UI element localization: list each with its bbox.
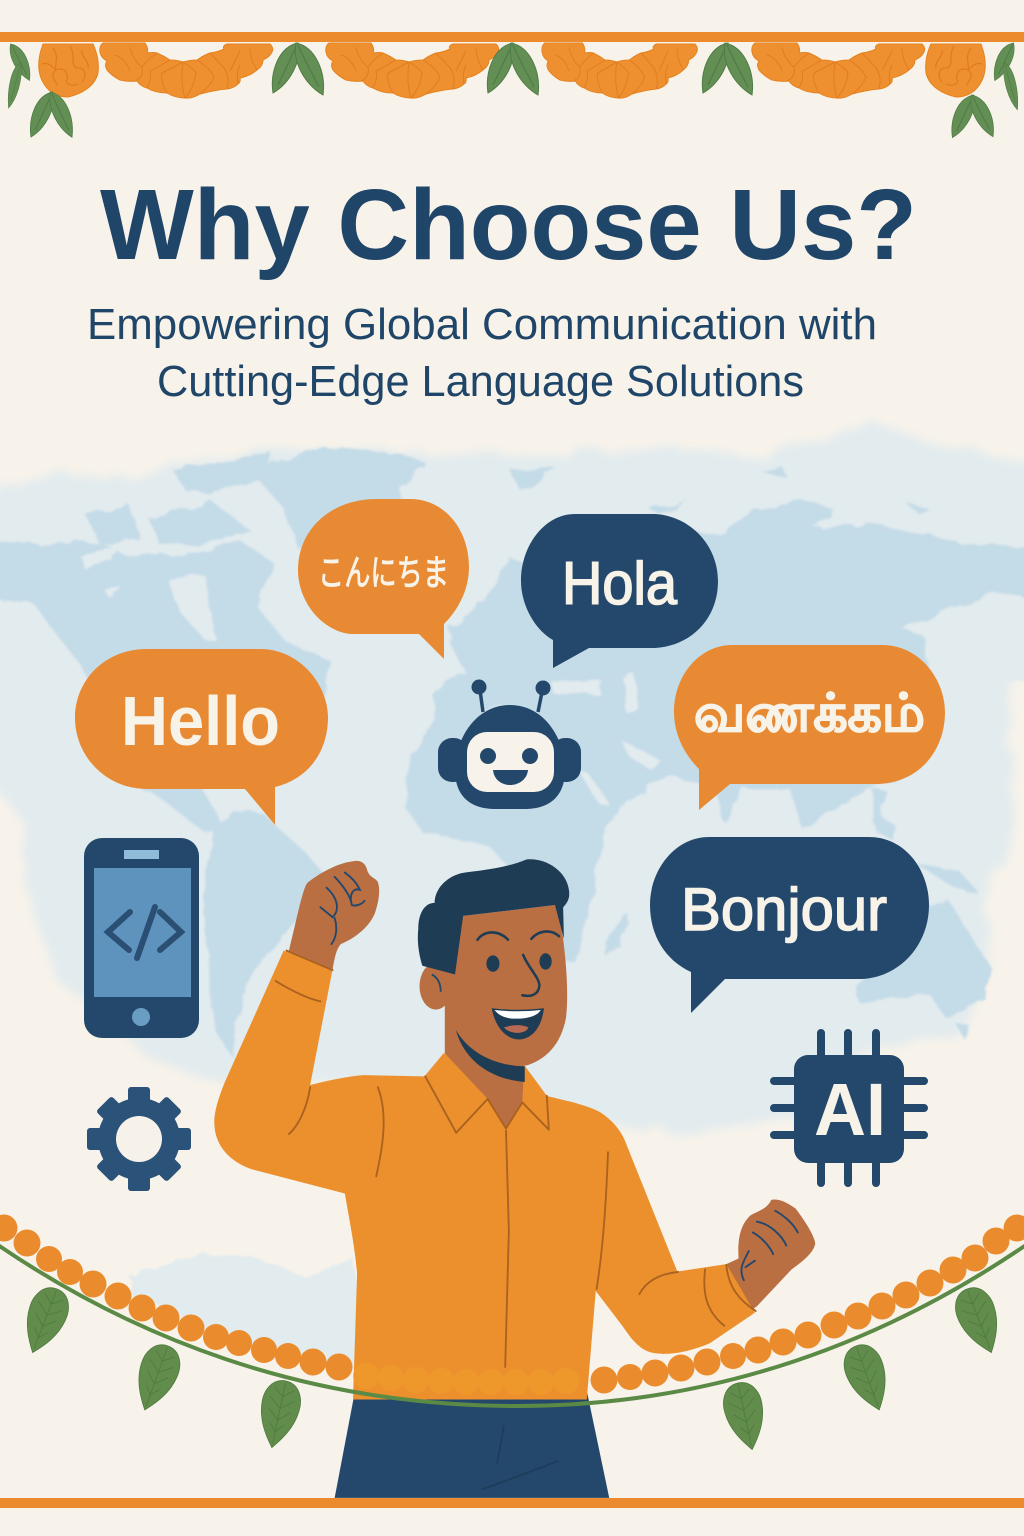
icon: robot — [438, 680, 581, 809]
icon: AI chip: AI — [814, 1068, 886, 1151]
madagascar — [605, 914, 629, 956]
lower fist — [726, 1200, 815, 1312]
trousers — [335, 1391, 609, 1498]
top border band — [0, 32, 1024, 42]
shirt creases — [275, 951, 756, 1367]
new guinea — [915, 863, 979, 893]
south america — [205, 813, 325, 1057]
japan — [965, 595, 1000, 650]
arctic islands — [173, 453, 273, 495]
subtitle: Cutting-Edge Language Solutions — [157, 357, 804, 406]
title: Why Choose Us? — [100, 169, 917, 281]
central america — [143, 785, 225, 832]
hair — [418, 859, 569, 974]
speech bubble: Hola — [521, 514, 718, 668]
marigold swag 1 — [100, 43, 273, 98]
speech bubble: Tamil: வணக்கம் — [694, 684, 925, 743]
garland string and leaves — [0, 1245, 1024, 1453]
speech bubble: Hello: Hello — [121, 682, 280, 760]
brows and nose — [477, 931, 559, 996]
subtitle: Empowering Global Communication with — [87, 300, 877, 349]
bottom border band — [0, 1498, 1024, 1508]
world map background — [0, 418, 1024, 1375]
north america — [0, 540, 330, 790]
icon: gear — [87, 1087, 191, 1191]
garland beads — [0, 1214, 1024, 1394]
face — [446, 905, 567, 1066]
left marigold rosette — [39, 44, 98, 97]
icon: AI chip — [774, 1033, 924, 1183]
ear — [420, 963, 452, 1010]
speech bubble: Hola: Hola — [562, 550, 678, 617]
collar — [425, 1053, 488, 1133]
greenland — [250, 447, 425, 550]
leaf cluster 2 — [487, 43, 539, 95]
man celebrating — [214, 859, 815, 1498]
leaf cluster 1 — [272, 43, 324, 95]
beard line — [456, 1030, 525, 1082]
speech bubble: Japanese: こんにちま — [318, 552, 449, 593]
speech bubble: Tamil — [674, 645, 945, 810]
top marigold garland — [8, 43, 1018, 138]
right corner leaves — [952, 43, 1018, 138]
marigold swag 2 — [326, 43, 499, 98]
subtitle — [87, 300, 877, 406]
uk — [447, 622, 473, 648]
eurasia and africa — [405, 499, 1024, 960]
tasmania — [958, 1025, 972, 1040]
icon: phone with code — [84, 838, 199, 1038]
australia — [857, 901, 992, 1017]
raised fist — [289, 861, 379, 969]
faint beads over the shirt — [353, 1363, 579, 1395]
mouth — [492, 1008, 544, 1040]
marigold swag 3 — [542, 43, 697, 98]
neck — [445, 992, 525, 1128]
speech bubble: Bonjour: Bonjour — [681, 876, 887, 943]
eyes — [486, 955, 499, 972]
right marigold rosette — [926, 44, 985, 97]
leaf cluster 3 — [702, 43, 753, 95]
small arctic islands — [512, 468, 555, 490]
speech bubble: Hello — [75, 649, 328, 825]
speech bubble: Japanese — [298, 499, 469, 659]
shirt — [214, 951, 755, 1399]
left corner leaves — [8, 44, 72, 137]
marigold swag 4 — [752, 43, 925, 98]
indonesia — [872, 788, 895, 838]
speech bubble: Bonjour — [650, 837, 929, 1013]
